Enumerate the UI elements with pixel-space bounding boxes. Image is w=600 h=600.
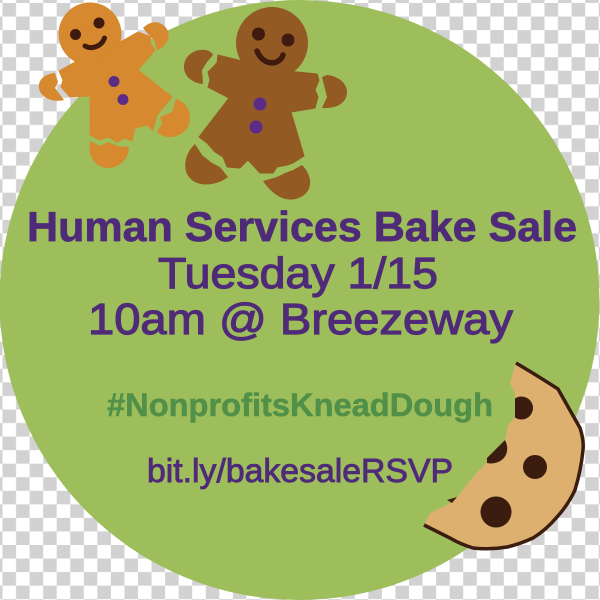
brown body (199, 55, 319, 173)
brown smile (257, 51, 283, 63)
orange right foot (157, 99, 190, 137)
title: Human Services Bake Sale (27, 203, 577, 250)
orange right hand (143, 22, 169, 50)
brown left foot (185, 144, 228, 185)
orange body (59, 32, 172, 142)
orange buttons (108, 76, 120, 87)
brown right hand (322, 75, 347, 108)
hashtag: #NonprofitsKneadDough (107, 387, 493, 423)
cookie outline (424, 363, 583, 549)
time and place: 10am @ Breezeway (88, 295, 513, 344)
cookie chips (515, 396, 533, 420)
orange left hand (39, 73, 64, 101)
orange eyes (70, 29, 81, 40)
cookie (424, 363, 583, 549)
link: bit.ly/bakesaleRSVP (147, 452, 453, 489)
brown eyes (252, 28, 265, 40)
orange smile (85, 38, 104, 48)
brown left hand (184, 50, 213, 84)
gingerbread: brown (184, 7, 347, 200)
brown head (236, 7, 308, 79)
cookie body (424, 363, 583, 549)
gingerbread: orange (39, 2, 190, 168)
date: Tuesday 1/15 (158, 249, 438, 298)
brown buttons (254, 98, 266, 110)
orange head (58, 2, 122, 66)
orange left foot (89, 141, 129, 168)
brown right foot (263, 165, 310, 200)
